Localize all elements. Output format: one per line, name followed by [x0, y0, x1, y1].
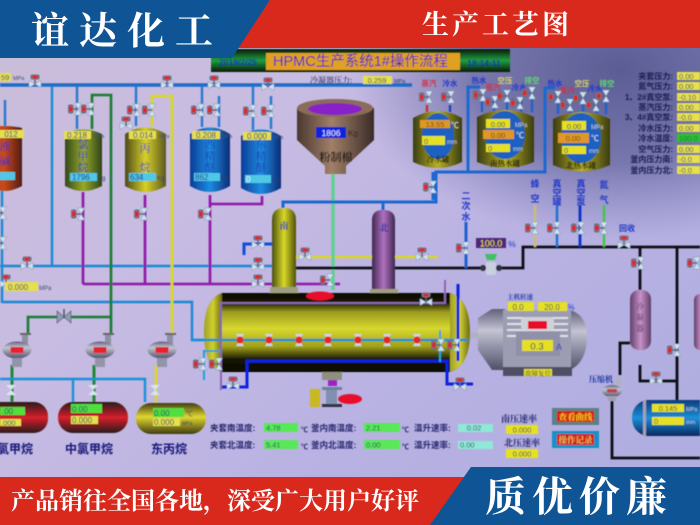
- control valve with percent readout: 100.0: [480, 238, 502, 248]
- right status list: 3、4#真空泵:: [625, 112, 673, 122]
- vertical line labels: [461, 178, 635, 233]
- process pipework: [0, 85, 700, 458]
- motor speed readouts: 20.0: [544, 303, 560, 312]
- motor speed readouts: %: [567, 303, 575, 312]
- temperature readout rows: 温升速率:: [414, 440, 451, 450]
- tank: propane: 634: [130, 173, 144, 182]
- heater tank: north hot water: 0: [564, 146, 568, 155]
- lower storage tank: east propane: 东丙烷: [151, 441, 187, 456]
- vertical line labels: 真: [576, 178, 586, 189]
- vertical line labels: 空: [576, 187, 586, 198]
- temperature readout rows: ℃: [301, 426, 308, 434]
- heater line labels: 空压: [498, 75, 513, 85]
- temperature readout rows: 4.78: [266, 424, 281, 432]
- tank: west refined ether: 精: [204, 149, 216, 163]
- heater tank: cold water: mm: [447, 140, 457, 146]
- motor: 故障复位: [525, 368, 552, 378]
- heater tank: cold water: 0: [424, 137, 428, 146]
- tank: west refined ether: MPa: [222, 134, 232, 140]
- vertical line labels: 氮: [599, 179, 609, 190]
- pressure readout left: MPa: [39, 286, 52, 292]
- tank: propane: MPa: [159, 134, 170, 140]
- temperature readout rows: 0.00: [366, 440, 381, 450]
- temperature readout rows: 夹套南温度:: [210, 423, 256, 433]
- right status values: 0.00: [679, 124, 694, 133]
- tank: propane: 烷: [140, 160, 150, 174]
- lower right blue tank: 0: [654, 417, 658, 426]
- pressure rate readouts: 0.000: [513, 450, 531, 458]
- lower storage tank: middle chloromethane: 中氯甲烷: [65, 441, 113, 456]
- reactor columns: [270, 208, 398, 295]
- system title bar: HPMC生产系统1#操作流程: [273, 53, 448, 70]
- heater line labels: 热水: [548, 78, 563, 88]
- lower storage tank: east propane: 0.00: [154, 409, 170, 418]
- header blue brand block: 谊达化工: [31, 11, 223, 53]
- vertical line labels: 二: [461, 191, 471, 201]
- temperature readout rows: 5.41: [266, 440, 281, 450]
- button: operation log: [552, 431, 599, 448]
- temperature readout rows: 夹套北温度:: [210, 440, 256, 450]
- heater line labels: 热水: [472, 75, 487, 85]
- tank: east refined ether: MPa: [273, 135, 284, 141]
- main reactor vessel: [192, 280, 473, 390]
- heater line labels: 冷水: [442, 78, 458, 88]
- pumps: [2, 333, 176, 367]
- pressure rate readouts: 南压速率: [501, 413, 538, 424]
- right status values: 100.0: [679, 134, 698, 143]
- tank: chloromethane: Kg: [98, 176, 105, 182]
- temperature readout rows: ℃: [301, 443, 308, 451]
- heater tank: south hot water: mm: [513, 147, 523, 153]
- lower right blue tank: 0.145: [659, 404, 677, 413]
- vertical line labels: 泵: [576, 197, 586, 207]
- lower right blue tank: MPa: [686, 407, 698, 413]
- right status values: -0.0: [679, 155, 692, 164]
- tank: west refined ether: Kg: [221, 176, 228, 182]
- pressure rate readouts: [501, 413, 541, 458]
- right status values: 0.00: [679, 145, 694, 154]
- header red band: [237, 0, 700, 48]
- lower storage tank: east propane: 0.000: [154, 418, 175, 427]
- lower right blue tank: mm: [686, 420, 696, 426]
- tank: east refined ether: 精: [256, 149, 266, 163]
- control valve with percent readout: %: [508, 239, 516, 249]
- lower storage tank: east propane: ℃: [186, 410, 193, 418]
- temperature readout rows: [210, 423, 493, 451]
- pressure readout left: 0.000: [8, 283, 29, 292]
- heater line labels: 冷水: [588, 83, 603, 93]
- left pressure readout: MPa: [13, 76, 25, 82]
- motor: A: [556, 342, 562, 352]
- reactor columns: 北: [379, 223, 389, 233]
- system title bar: 18:14:11: [467, 58, 501, 68]
- button: operation log: 操作记录: [558, 435, 593, 445]
- process mimic screen: [0, 49, 700, 458]
- footer blue slogan block: [430, 467, 700, 525]
- compressor: [589, 374, 622, 401]
- heater tank: south hot water: MPa: [515, 123, 528, 129]
- button: view curves: [552, 408, 599, 425]
- vertical line labels: 回收: [619, 223, 635, 233]
- button: view curves: 查看曲线: [558, 412, 593, 422]
- vertical line labels: 真: [552, 178, 562, 189]
- tank: chloromethane: [64, 130, 105, 191]
- right status values: -0.10: [679, 93, 696, 102]
- heater tank: north hot water: 0.00: [567, 122, 581, 131]
- condensers: 凝: [636, 312, 644, 322]
- system title bar: 2019/2/25: [219, 57, 257, 67]
- right status list: 冷水温度:: [638, 133, 673, 143]
- header red band: 生产工艺图: [422, 10, 572, 40]
- temperature readout rows: 0.02: [467, 424, 481, 432]
- condenser pressure readout: MPa: [394, 79, 406, 85]
- right status list: 夹套压力:: [638, 71, 673, 81]
- heater line labels: [422, 75, 615, 95]
- lower storage tank: middle chloromethane: 0.00: [72, 405, 88, 414]
- tank: chloromethane: 甲: [78, 150, 88, 163]
- tank: west refined ether: 0.208: [196, 131, 217, 140]
- heater tank: north hot water: ℃: [591, 134, 599, 143]
- heater tank: north hot water: [553, 112, 610, 172]
- tank: west refined ether: 醚: [204, 160, 216, 174]
- right status values: [677, 72, 700, 175]
- right status list: 冷水压力:: [638, 123, 673, 133]
- vertical line labels: 气: [599, 194, 609, 205]
- motor speed readouts: 0.0: [512, 303, 524, 312]
- heater line labels: 排空: [524, 75, 540, 85]
- condensers: 器: [636, 324, 644, 333]
- heater tank: south hot water: 南热水罐: [490, 158, 520, 168]
- heater tank: south hot water: 0.00: [491, 120, 505, 129]
- pressure rate readouts: 北压速率: [504, 437, 541, 448]
- heater tank: south hot water: [477, 110, 534, 168]
- heater tank: cold water: [413, 111, 462, 168]
- right status list: 1、2#真空泵:: [625, 92, 673, 102]
- footer red slogan band: 产品销往全国各地，深受广大用户好评: [11, 488, 419, 515]
- tank: east refined ether: 东: [256, 138, 266, 151]
- heater tank: north hot water: mm: [589, 149, 599, 155]
- lower-left storage tank: .00: [2, 407, 14, 416]
- right status values: -0.0: [679, 166, 692, 175]
- right status list: 釜内压力南:: [630, 154, 673, 164]
- temperature readout rows: 釜内南温度:: [311, 423, 357, 433]
- tank: propane: 0.014: [133, 131, 154, 140]
- compressor: 压缩机: [589, 374, 613, 384]
- tank: chloromethane: 氯: [78, 137, 88, 151]
- heater tank: north hot water: 0.00: [566, 134, 580, 143]
- condenser pressure readout: 冷凝器压力:: [310, 75, 352, 85]
- right status list: [625, 71, 673, 175]
- heater tank: cold water: 冷水罐: [427, 154, 450, 164]
- vertical line labels: 水: [461, 211, 471, 222]
- right status list: 氮气压力:: [638, 81, 673, 91]
- reactor outlet: [310, 372, 362, 407]
- heater line labels: 蒸汽: [422, 78, 437, 88]
- temperature readout rows: 2.21: [366, 424, 381, 432]
- motor speed readouts: 主机转速: [507, 292, 534, 301]
- control valve with percent readout: [476, 238, 516, 275]
- tank: east refined ether: 醚: [256, 160, 268, 174]
- vertical line labels: 空: [552, 187, 562, 198]
- heater tank: cold water: 13.55: [426, 120, 444, 129]
- hopper: refined cotton: 粉制棉: [320, 150, 352, 164]
- vertical line labels: 次: [461, 200, 471, 211]
- tank: chloromethane: 0.218: [67, 131, 88, 140]
- left pressure readout: [0, 73, 25, 82]
- reactor columns: 南: [279, 220, 289, 231]
- vertical line labels: 空: [530, 193, 540, 204]
- lower storage tank: east propane: MPa: [182, 421, 192, 427]
- heater line labels: 空压: [574, 78, 590, 88]
- hopper: refined cotton: Kg: [348, 129, 358, 138]
- right status values: 0.00: [679, 103, 694, 112]
- lower-left storage tank: [0, 402, 48, 456]
- right status list: 蒸汽压力:: [638, 102, 673, 112]
- valves: [0, 74, 700, 395]
- footer red slogan band: [0, 477, 466, 525]
- heater tank: north hot water: MPa: [591, 125, 604, 131]
- right status values: 0.00: [679, 82, 694, 91]
- tank: propane: [125, 128, 170, 192]
- hopper: refined cotton: 1806: [322, 128, 341, 138]
- right status list: 釜内压力北:: [630, 165, 673, 175]
- temperature readout rows: ℃: [402, 426, 409, 434]
- condenser pressure readout: [310, 75, 406, 85]
- heater tank: south hot water: 0.00: [491, 131, 505, 140]
- footer blue slogan block: 质优价廉: [485, 474, 673, 520]
- right status values: 0.00: [679, 72, 694, 81]
- pressure readout left: [5, 282, 52, 292]
- tank: left red: 012: [4, 130, 18, 139]
- tank: chloromethane: 烷: [78, 160, 88, 174]
- heater tank: cold water: ℃: [451, 121, 459, 130]
- heater line labels: 蒸汽: [486, 82, 501, 92]
- condenser pressure readout: 0.259: [368, 76, 386, 85]
- tank: west refined ether: [190, 128, 232, 192]
- tank: east refined ether: Kg: [272, 178, 279, 184]
- lower storage tank: middle chloromethane: 0.000: [72, 416, 93, 425]
- tank: left red: [0, 126, 24, 191]
- motor speed readouts: [507, 292, 575, 312]
- heater tank: south hot water: 0: [488, 144, 492, 153]
- left pressure readout: 59: [1, 73, 9, 82]
- lower-left storage tank: .000: [1, 418, 16, 428]
- condensers: [630, 290, 700, 350]
- right status list: 空气压力:: [638, 144, 673, 154]
- vertical line labels: 蜂: [530, 178, 540, 189]
- tank: east refined ether: [241, 130, 284, 194]
- tank: east refined ether: 0: [246, 175, 251, 184]
- tank: propane: Kg: [157, 176, 164, 182]
- temperature readout rows: 温升速率:: [414, 423, 451, 433]
- lower storage tank: east propane: [136, 403, 206, 456]
- right status values: -0.0: [679, 113, 692, 122]
- system title bar: [211, 49, 510, 72]
- lower right blue tank: [632, 400, 700, 436]
- heater line labels: 蒸汽: [560, 85, 575, 95]
- vertical line labels: 罐: [552, 196, 562, 207]
- heater tank: south hot water: ℃: [516, 131, 524, 140]
- tank: propane: 丙: [140, 142, 150, 155]
- temperature readout rows: 0.00: [460, 440, 475, 450]
- tank: chloromethane: MPa: [94, 134, 104, 140]
- heater tank: north hot water: 北热水罐: [566, 160, 596, 170]
- temperature readout rows: ℃: [402, 443, 409, 451]
- condensers: 冷: [636, 301, 644, 311]
- motor: 0.3: [530, 342, 544, 352]
- hopper: refined cotton: [297, 99, 374, 174]
- tank: east refined ether: 0.000: [247, 132, 268, 141]
- motor: [470, 309, 587, 378]
- temperature readout rows: 釜内北温度:: [311, 440, 357, 450]
- heater line labels: 排空: [600, 78, 615, 88]
- pressure rate readouts: 0.000: [513, 426, 531, 434]
- header blue brand block: [0, 0, 270, 58]
- tank: west refined ether: 862: [195, 173, 209, 182]
- tank: chloromethane: 1796: [72, 173, 90, 182]
- tank: west refined ether: 西: [204, 138, 216, 151]
- lower storage tank: middle chloromethane: [58, 402, 128, 456]
- heater line labels: 冷水: [512, 82, 527, 92]
